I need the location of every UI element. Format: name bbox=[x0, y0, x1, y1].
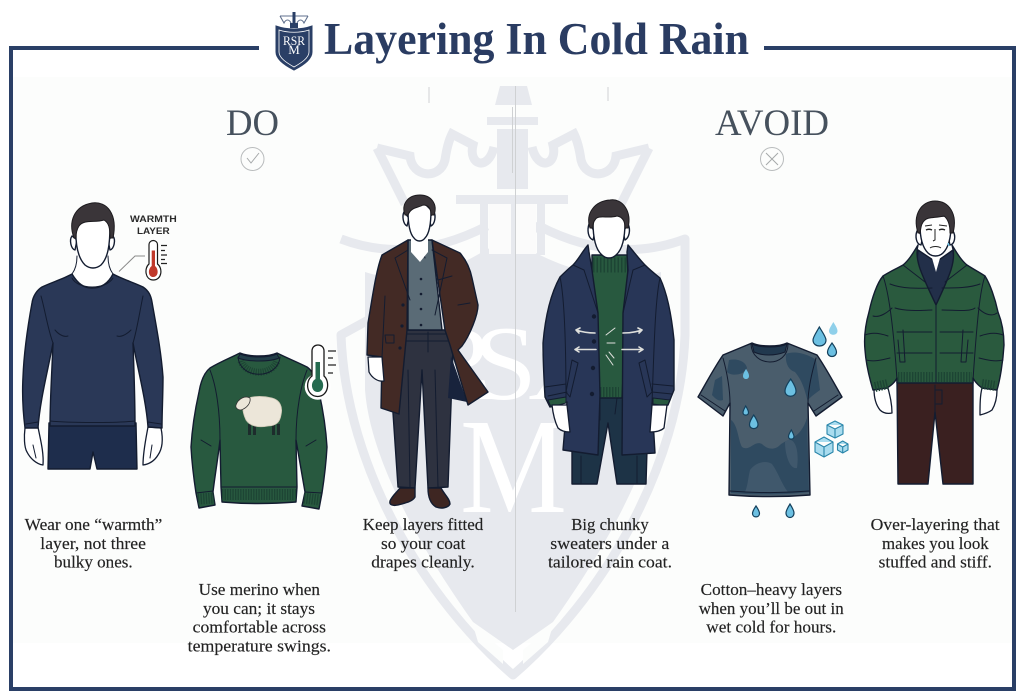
watermark: brand shield: S bbox=[473, 305, 537, 422]
icon: cross circle bbox=[760, 148, 784, 170]
icon: check circle bbox=[241, 148, 264, 170]
caption: over-layering bbox=[871, 515, 1000, 572]
heading: DO: DO bbox=[226, 103, 279, 144]
caption: cotton layers: Cotton–heavy layers bbox=[701, 580, 842, 599]
caption: chunky sweaters bbox=[548, 515, 672, 572]
icon: brand logo shield: M bbox=[288, 42, 300, 57]
watermark: brand shield: M bbox=[460, 392, 567, 542]
title: Layering In Cold Rain bbox=[324, 14, 749, 64]
caption: merino: Use merino when bbox=[199, 580, 320, 599]
caption: merino: comfortable across bbox=[193, 618, 326, 637]
icon: brand logo shield: RSR bbox=[283, 33, 305, 48]
figure: man in brown overcoat bbox=[367, 195, 488, 508]
caption: chunky sweaters: Big chunky bbox=[571, 515, 649, 534]
caption: chunky sweaters: sweaters under a bbox=[550, 534, 670, 553]
icon: brand logo shield bbox=[276, 12, 312, 70]
heading: DO bbox=[226, 103, 279, 170]
watermark: brand shield: R bbox=[425, 305, 496, 422]
caption: merino: temperature swings. bbox=[188, 636, 331, 655]
caption: fitted layers: drapes cleanly. bbox=[371, 553, 475, 572]
icon: sheep bbox=[236, 396, 282, 435]
caption: merino bbox=[188, 580, 331, 655]
watermark: brand shield bbox=[341, 86, 685, 675]
caption: fitted layers: Keep layers fitted bbox=[363, 515, 484, 534]
caption: fitted layers: so your coat bbox=[381, 534, 466, 553]
caption: fitted layers bbox=[363, 515, 484, 572]
icon: green thermometer bbox=[305, 345, 336, 400]
watermark: brand shield: R bbox=[529, 305, 600, 422]
caption: warmth layer: layer, not three bbox=[40, 534, 146, 553]
caption: cotton layers: when you’ll be out in bbox=[699, 599, 844, 618]
caption: warmth layer: Wear one “warmth” bbox=[25, 515, 162, 534]
figure: wet cotton t-shirt bbox=[698, 322, 848, 518]
icon: worried face bbox=[925, 225, 949, 248]
divider: center vertical line bbox=[429, 86, 608, 612]
callout: warmth layer thermometer bbox=[119, 214, 177, 280]
icon: water drops bbox=[743, 322, 838, 518]
figure: man in navy coat with chunky sweater bbox=[543, 200, 674, 484]
caption: cotton layers bbox=[699, 580, 844, 637]
icon: strain arrows bbox=[575, 328, 643, 365]
caption: warmth layer bbox=[25, 515, 162, 572]
figure: man in navy sweater bbox=[23, 203, 163, 469]
heading: AVOID bbox=[715, 103, 829, 170]
caption: warmth layer: bulky ones. bbox=[54, 553, 133, 572]
figure: man in stuffed puffer jacket bbox=[865, 201, 1004, 484]
caption: merino: you can; it stays bbox=[203, 599, 315, 618]
callout: warmth layer thermometer: LAYER bbox=[137, 226, 170, 237]
caption: over-layering: stuffed and stiff. bbox=[879, 553, 992, 572]
callout: warmth layer thermometer: WARMTH bbox=[130, 214, 177, 225]
figure: green merino sweater bbox=[191, 353, 327, 509]
caption: chunky sweaters: tailored rain coat. bbox=[548, 553, 672, 572]
icon: ice cubes bbox=[815, 421, 848, 457]
caption: over-layering: Over-layering that bbox=[871, 515, 1000, 534]
caption: over-layering: makes you look bbox=[882, 534, 989, 553]
heading: AVOID: AVOID bbox=[715, 103, 829, 144]
caption: cotton layers: wet cold for hours. bbox=[706, 618, 836, 637]
